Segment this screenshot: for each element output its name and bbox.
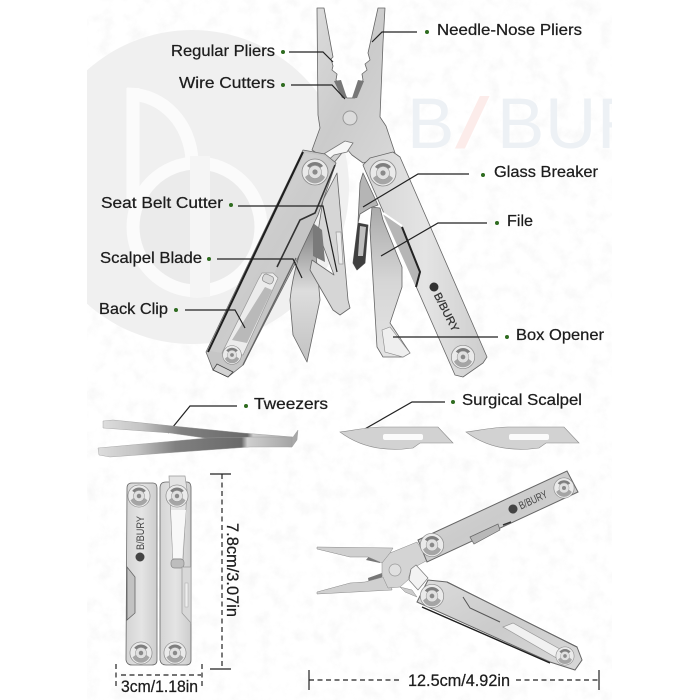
background mottled texture bbox=[87, 0, 612, 700]
label: wire cutters bbox=[179, 75, 345, 99]
closed left handle bbox=[126, 483, 157, 665]
closed multitool bbox=[126, 476, 191, 665]
label: surgical scalpel: Surgical Scalpel bbox=[462, 392, 582, 409]
closed right handle bbox=[160, 482, 191, 665]
dimension: open length: 12.5cm/4.92in bbox=[408, 671, 510, 690]
dimension: open length bbox=[309, 670, 599, 690]
label: seat belt cutter bbox=[101, 195, 337, 272]
main multitool bbox=[206, 8, 487, 377]
tweezers bbox=[98, 420, 298, 457]
pliers head bbox=[312, 8, 395, 164]
label: scalpel blade bbox=[100, 250, 302, 278]
blade 2 bbox=[466, 427, 579, 449]
box opener notch bbox=[382, 327, 410, 357]
brand on open handle: B/BURY bbox=[517, 489, 550, 512]
dimension: height bbox=[210, 474, 242, 669]
brand on closed handle bbox=[135, 515, 147, 562]
back clip bbox=[222, 273, 278, 355]
label: needle-nose pliers: Needle-Nose Pliers bbox=[437, 22, 582, 39]
open multitool bbox=[317, 471, 582, 670]
brand on right handle: B/BURY bbox=[431, 291, 461, 334]
label: file bbox=[381, 213, 533, 256]
open lower handle bbox=[417, 580, 582, 670]
labels and leader lines bbox=[99, 22, 605, 433]
wire cutter inner faces bbox=[334, 80, 364, 98]
seat belt cutter bbox=[310, 173, 350, 315]
label: tweezers bbox=[168, 396, 328, 433]
label: box opener bbox=[393, 327, 605, 344]
label: box opener: Box Opener bbox=[516, 327, 605, 344]
watermark: brand logo bbox=[87, 30, 349, 344]
label: back clip bbox=[99, 301, 245, 328]
label: wire cutters: Wire Cutters bbox=[179, 75, 275, 92]
label: tweezers: Tweezers bbox=[254, 396, 328, 413]
brand on right handle bbox=[426, 281, 461, 334]
watermark: brand name: / bbox=[455, 84, 491, 163]
watermark: brand name: BBUR bbox=[407, 85, 648, 164]
scalpel blade bbox=[290, 220, 320, 362]
surgical scalpel blades bbox=[340, 427, 579, 449]
locking lever bbox=[322, 141, 353, 162]
label: file: File bbox=[507, 213, 533, 230]
open upper jaw bbox=[317, 547, 393, 563]
left handle bbox=[206, 150, 336, 377]
blade 1 bbox=[340, 427, 453, 449]
open head bbox=[382, 542, 428, 588]
label: needle-nose pliers bbox=[372, 22, 582, 42]
label: glass breaker bbox=[363, 164, 599, 207]
label: glass breaker: Glass Breaker bbox=[494, 164, 599, 181]
label: surgical scalpel bbox=[363, 392, 582, 430]
dimension: closed width: 3cm/1.18in bbox=[121, 677, 198, 696]
right handle bbox=[363, 152, 487, 377]
brand on closed handle: B/BURY bbox=[135, 515, 147, 550]
file bbox=[370, 207, 410, 357]
label: back clip: Back Clip bbox=[99, 301, 168, 318]
label: seat belt cutter: Seat Belt Cutter bbox=[101, 195, 224, 212]
label: regular pliers: Regular Pliers bbox=[171, 43, 275, 60]
open jaw: cutters bbox=[366, 555, 382, 584]
dimension: height: 7.8cm/3.07in bbox=[223, 523, 242, 617]
brand on open handle bbox=[507, 489, 550, 517]
watermark: brand name bbox=[413, 96, 612, 148]
glass breaker bbox=[353, 173, 378, 270]
open lower jaw bbox=[317, 575, 392, 594]
open upper handle bbox=[418, 471, 578, 562]
label: regular pliers bbox=[171, 43, 333, 62]
dimension: closed width bbox=[116, 664, 202, 696]
label: scalpel blade: Scalpel Blade bbox=[100, 250, 202, 267]
